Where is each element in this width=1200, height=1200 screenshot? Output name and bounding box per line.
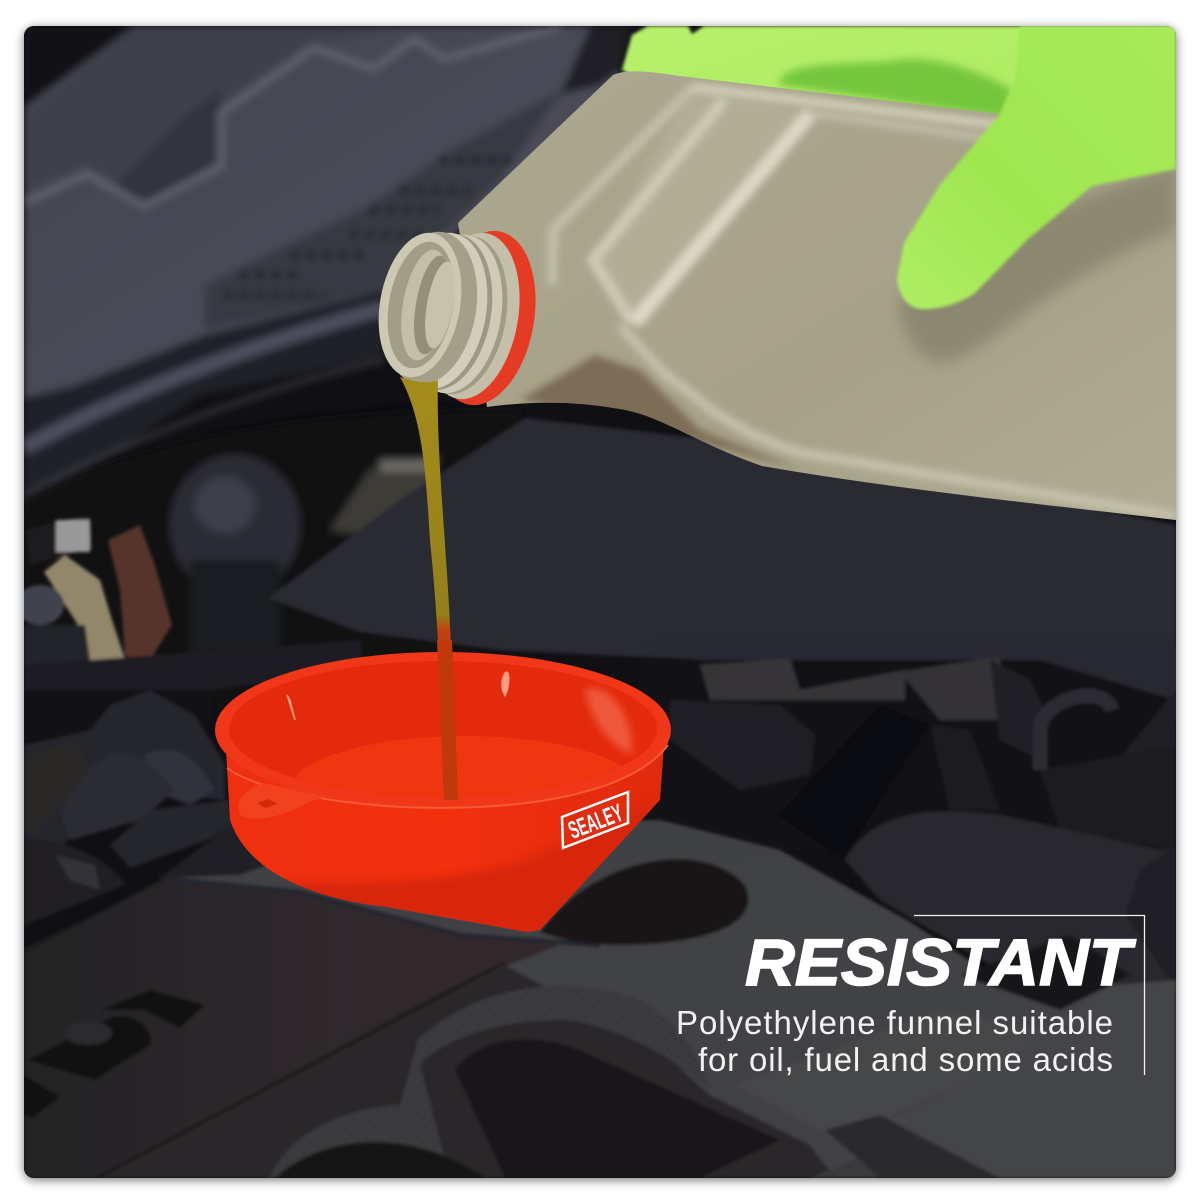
funnel floor	[295, 736, 622, 797]
heading: RESISTANT	[745, 925, 1136, 999]
vent grate	[204, 88, 565, 330]
glove behind bottle	[622, 26, 1176, 175]
dark mechanical parts left of funnel	[24, 690, 235, 925]
bottle	[458, 71, 1176, 520]
lower engine cover	[24, 820, 1176, 1178]
lip hole	[257, 799, 278, 808]
ridges	[552, 87, 693, 285]
dome	[170, 455, 300, 595]
stream inside funnel	[437, 640, 458, 800]
lower bevel	[620, 326, 1176, 516]
knurled strip	[270, 986, 712, 1178]
lower brown fold	[520, 355, 800, 470]
carpet	[270, 418, 1176, 660]
channel	[605, 97, 795, 306]
engine bay background	[25, 449, 444, 652]
caption text: Polyethylene funnel suitable	[676, 1004, 1113, 1041]
embossed letter shapes	[28, 1016, 151, 1080]
funnel recess	[540, 859, 748, 945]
hose	[24, 290, 385, 510]
funnel logo	[562, 792, 628, 848]
funnel	[215, 640, 671, 960]
thumb shadow	[897, 165, 1176, 362]
callout frame	[914, 916, 1144, 1075]
funnel body	[226, 745, 664, 932]
dark mechanical parts right of funnel	[669, 658, 1176, 986]
funnel logo: SEALEY	[565, 799, 627, 845]
upper engine cover	[24, 26, 628, 500]
caption text: for oil, fuel and some acids	[698, 1041, 1113, 1078]
oil stream	[400, 377, 451, 640]
connectors left	[24, 516, 363, 720]
caption text	[678, 1010, 1112, 1076]
funnel pouring lip	[238, 783, 327, 819]
glove thumb	[897, 26, 1176, 309]
inside bowl	[229, 661, 657, 778]
rim	[215, 652, 671, 808]
lower slot	[455, 1039, 780, 1178]
bottle neck with red ring	[378, 230, 536, 406]
lifted panels	[735, 1010, 1070, 1135]
